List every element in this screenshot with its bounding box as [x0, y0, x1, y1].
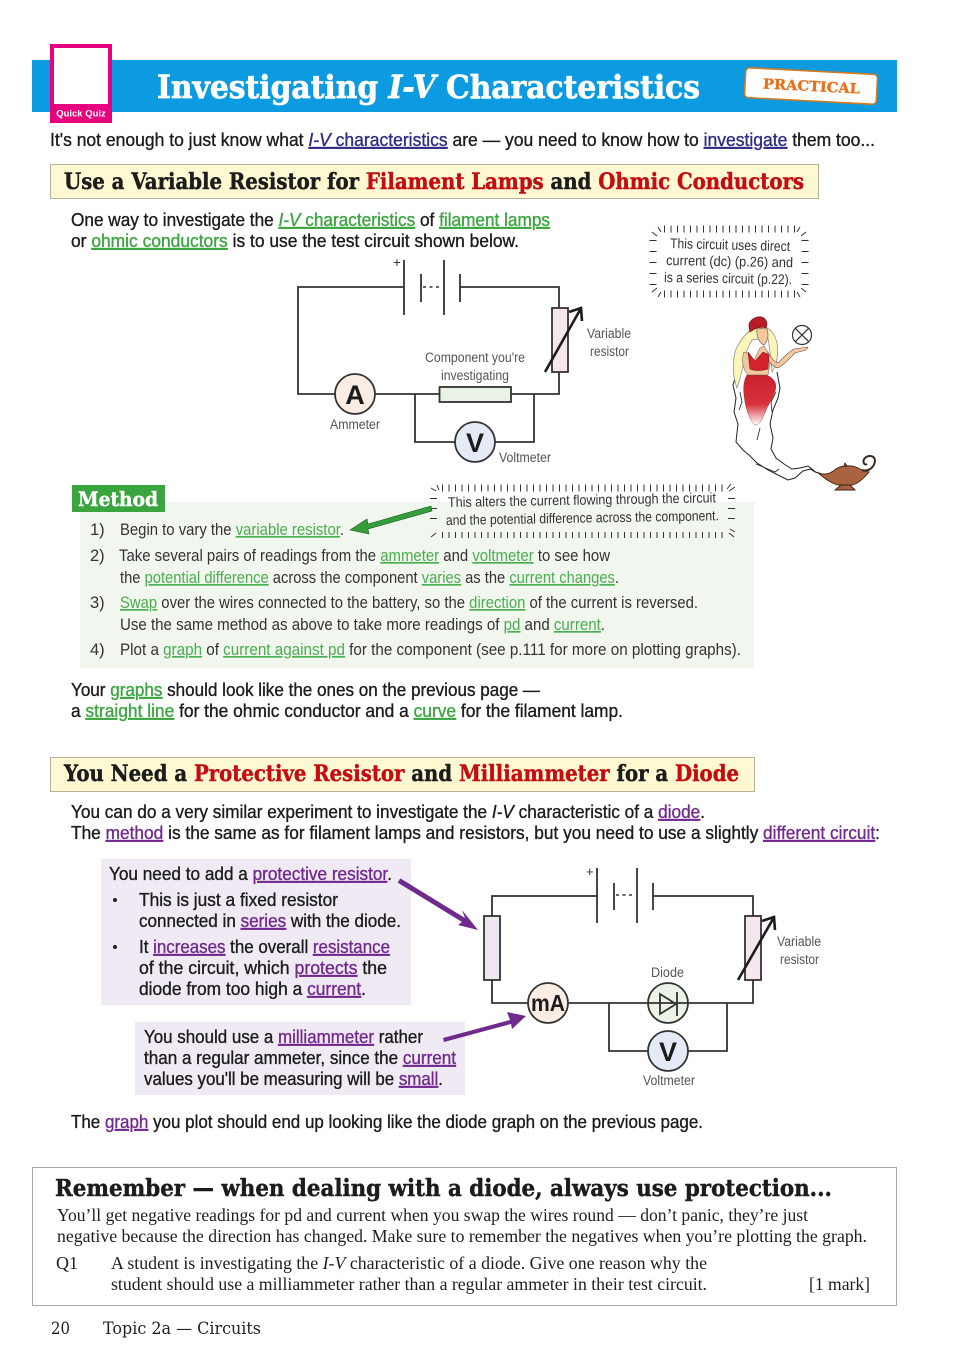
icon: filament lamp symbol: [792, 326, 812, 344]
genie hair: [733, 326, 778, 388]
callout: direct current note: [652, 227, 806, 297]
footer: page number and topic: 20: [51, 1319, 70, 1339]
quick quiz box: Quick Quiz: [56, 108, 106, 120]
icon: milliammeter: mA: [531, 990, 565, 1016]
text block: graphs summary: [71, 680, 623, 721]
panel: protective resistor: [101, 859, 411, 1005]
text block: remember body: You’ll get negative readings for pd and current when you swap the wires round — don’t panic, they’re just: [57, 1205, 808, 1225]
arrow: callout to variable resistor: [350, 506, 432, 534]
question Q1: A student is investigating the I-V characteristic of a diode. Give one reason why the: [111, 1253, 707, 1273]
text block: test circuit introduction: or ohmic conductors is to use the test circuit shown below.: [71, 231, 519, 251]
panel: protective resistor: of the circuit, which protects the: [139, 958, 387, 978]
title banner: [32, 60, 897, 112]
callout: direct current note: This circuit uses direct: [670, 235, 790, 254]
panel: protective resistor: It increases the overall resistance: [139, 937, 390, 957]
arrow: to milliammeter: [443, 1012, 526, 1042]
step 3: Swap over the wires connected to the battery, so the direction of the current is reversed.: [120, 594, 698, 612]
practical badge: PRACTICAL: [763, 76, 860, 98]
text block: test circuit introduction: [71, 210, 550, 251]
heading: page title: Investigating I-V Characteristics: [157, 68, 700, 106]
label: diode: Diode: [651, 965, 684, 980]
step 4: 4): [90, 641, 105, 659]
callout: what the variable resistor does: [431, 484, 735, 537]
panel: protective resistor: diode from too high a current.: [139, 979, 366, 999]
icon: ammeter: [335, 374, 375, 414]
label: variable resistor: resistor: [780, 952, 819, 967]
text block: remember body: [57, 1205, 867, 1246]
step 2: the potential difference across the component varies as the current changes.: [120, 569, 619, 587]
icon: diode: [648, 983, 688, 1023]
label: voltmeter: Voltmeter: [499, 450, 551, 465]
icon: ammeter: A: [345, 380, 365, 410]
panel: milliammeter: than a regular ammeter, since the current: [144, 1048, 456, 1068]
genie hat: [749, 317, 767, 332]
genie trousers: [744, 373, 776, 425]
label: component: investigating: [441, 368, 509, 383]
section heading: variable resistor: Use a Variable Resistor for Filament Lamps and Ohmic Conductors: [64, 169, 804, 195]
circuit diagram: diode circuit: +: [586, 864, 594, 879]
question Q1: [56, 1253, 870, 1294]
heading: method: Method: [78, 487, 158, 511]
question Q1: student should use a milliammeter rather than a regular ammeter in their test circuit.: [111, 1274, 707, 1294]
step 1: Begin to vary the variable resistor.: [120, 521, 344, 539]
icon: voltmeter: V: [659, 1037, 677, 1067]
callout: what the variable resistor does: This alters the current flowing through the circuit: [448, 489, 716, 510]
icon: milliammeter: [528, 983, 568, 1023]
circuit diagram: diode circuit: [484, 864, 821, 1088]
step 4: Plot a graph of current against pd for the component (see p.111 for more on plotting graphs).: [120, 641, 741, 659]
callout: direct current note: is a series circuit (p.22).: [664, 269, 792, 287]
heading: remember: Remember — when dealing with a diode, always use protection...: [55, 1175, 832, 1202]
label: variable resistor: [777, 934, 821, 967]
text block: diode introduction: The method is the same as for filament lamps and resistors, but you need to use a slightly different circuit:: [71, 823, 880, 843]
panel: protective resistor: This is just a fixed resistor: [139, 890, 338, 910]
callout: what the variable resistor does: and the potential difference across the component.: [446, 507, 719, 528]
step 2: 2): [90, 547, 105, 565]
label: variable resistor: Variable: [587, 326, 631, 341]
genie torso and left arm: [743, 346, 771, 375]
label: component: [425, 350, 525, 383]
genie top: [748, 352, 769, 370]
panel: protective resistor: connected in series with the diode.: [139, 911, 401, 931]
label: component: Component you're: [425, 350, 525, 365]
icon: voltmeter: [455, 422, 495, 462]
panel: milliammeter: values you'll be measuring will be small.: [144, 1069, 443, 1089]
text block: test circuit introduction: One way to investigate the I-V characteristics of filament lamps: [71, 210, 550, 230]
quick quiz box: [50, 44, 112, 123]
step 2: Take several pairs of readings from the ammeter and voltmeter to see how: [119, 547, 610, 565]
circuit diagram: variable resistor test circuit: [298, 255, 631, 465]
genie smoke: [733, 372, 817, 480]
label: ammeter: Ammeter: [330, 417, 380, 432]
section heading: diode: You Need a Protective Resistor and Milliammeter for a Diode: [63, 761, 739, 787]
intro sentence: It's not enough to just know what I-V characteristics are — you need to know how to investigate them too...: [50, 130, 875, 150]
text block: remember body: negative because the direction has changed. Make sure to remember the negatives when you’re plotting the graph.: [57, 1226, 867, 1246]
text block: diode introduction: [71, 802, 880, 843]
question Q1: [1 mark]: [809, 1274, 870, 1294]
text block: graphs summary: a straight line for the ohmic conductor and a curve for the filament lamp.: [71, 701, 623, 721]
oil lamp: [817, 463, 869, 490]
icon: voltmeter: V: [466, 428, 484, 458]
question Q1: Q1: [56, 1253, 78, 1273]
label: voltmeter: Voltmeter: [643, 1073, 695, 1088]
callout: direct current note: current (dc) (p.26) and: [666, 252, 793, 270]
text block: diode introduction: You can do a very similar experiment to investigate the I-V characteristic of a diode.: [71, 802, 705, 822]
icon: voltmeter: [648, 1031, 688, 1071]
step 3: [90, 594, 698, 634]
label: variable resistor: Variable: [777, 934, 821, 949]
step 3: Use the same method as above to take more readings of pd and current.: [120, 616, 605, 634]
illustration: genie and lamp holding a lamp symbol: [733, 317, 875, 490]
panel: protective resistor: You need to add a protective resistor.: [109, 864, 392, 884]
practical badge: [744, 68, 878, 104]
step 3: 3): [90, 594, 105, 612]
circuit diagram: variable resistor test circuit: +: [393, 255, 401, 270]
genie face: [757, 328, 768, 345]
text block: graphs summary: Your graphs should look like the ones on the previous page —: [71, 680, 540, 700]
panel: method: [72, 485, 754, 668]
text block: diode graph note: The graph you plot should end up looking like the diode graph on the previous page.: [71, 1112, 703, 1132]
label: variable resistor: resistor: [590, 344, 629, 359]
panel: milliammeter: [135, 1022, 465, 1095]
genie right arm: [767, 347, 808, 368]
panel: milliammeter: You should use a milliammeter rather: [144, 1027, 423, 1047]
genie smoke wisps: [739, 392, 779, 472]
panel: remember box: [32, 1168, 896, 1306]
arrow: to protective resistor: [398, 878, 478, 930]
footer: page number and topic: Topic 2a — Circuits: [103, 1319, 261, 1339]
step 1: 1): [90, 521, 105, 539]
label: variable resistor: [587, 326, 631, 359]
step 2: [90, 547, 619, 587]
